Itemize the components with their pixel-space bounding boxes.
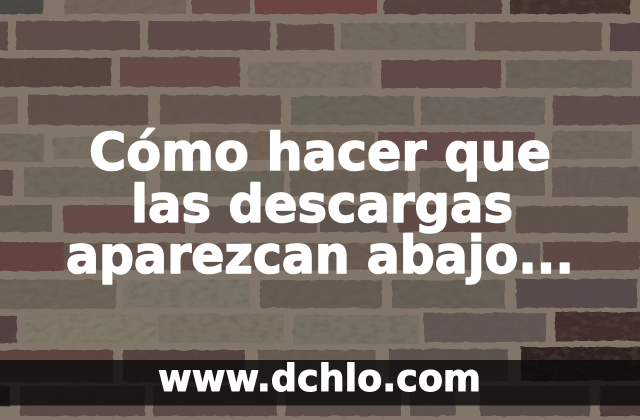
title: aparezcan abajo... xyxy=(66,226,574,286)
website url: www.dchlo.com xyxy=(158,357,481,400)
title: las descargas xyxy=(131,175,513,235)
title: Cómo hacer que xyxy=(89,123,551,183)
title xyxy=(66,123,574,286)
footer banner xyxy=(0,360,640,406)
